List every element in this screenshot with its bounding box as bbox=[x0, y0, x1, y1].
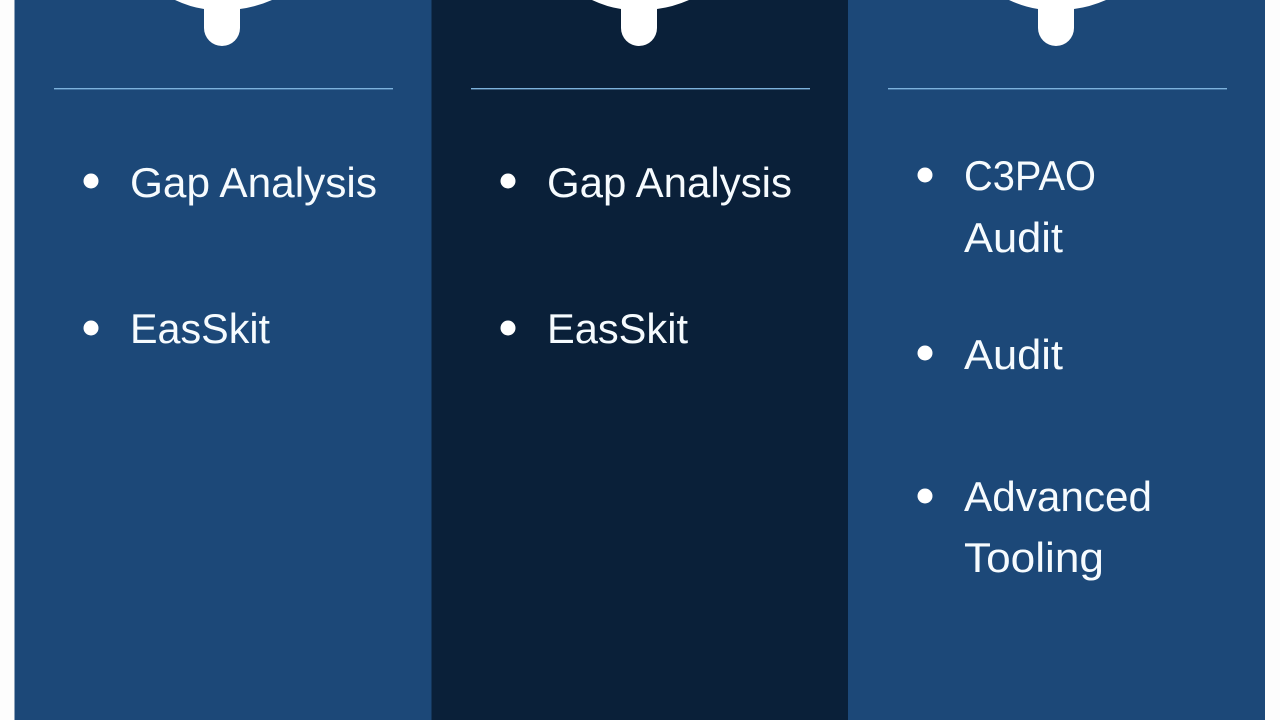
list: left column bbox=[84, 159, 377, 352]
list: right column: Audit bbox=[964, 331, 1063, 378]
icon: middle badge cut off at top bbox=[592, 0, 689, 46]
list: right column: C3PAO bbox=[964, 152, 1096, 199]
panel: middle column bbox=[432, 0, 848, 720]
list: right column: Tooling bbox=[964, 534, 1104, 581]
list: left column: EasSkit bbox=[130, 305, 270, 352]
list: middle column bbox=[500, 159, 792, 352]
divider: left column bbox=[54, 88, 393, 89]
list: right column: Audit bbox=[964, 214, 1063, 261]
panel: left column bbox=[14, 0, 432, 720]
list: right column: Advanced bbox=[964, 473, 1152, 520]
list: middle column: EasSkit bbox=[547, 305, 688, 352]
panel: right column bbox=[848, 0, 1265, 720]
icon: right badge cut off at top bbox=[1009, 0, 1106, 46]
list: right column bbox=[918, 152, 1152, 581]
divider: right column bbox=[888, 88, 1227, 89]
list: left column: Gap Analysis bbox=[130, 159, 377, 206]
divider: middle column bbox=[471, 88, 810, 89]
list: middle column: Gap Analysis bbox=[547, 159, 792, 206]
icon: left badge cut off at top bbox=[175, 0, 272, 46]
